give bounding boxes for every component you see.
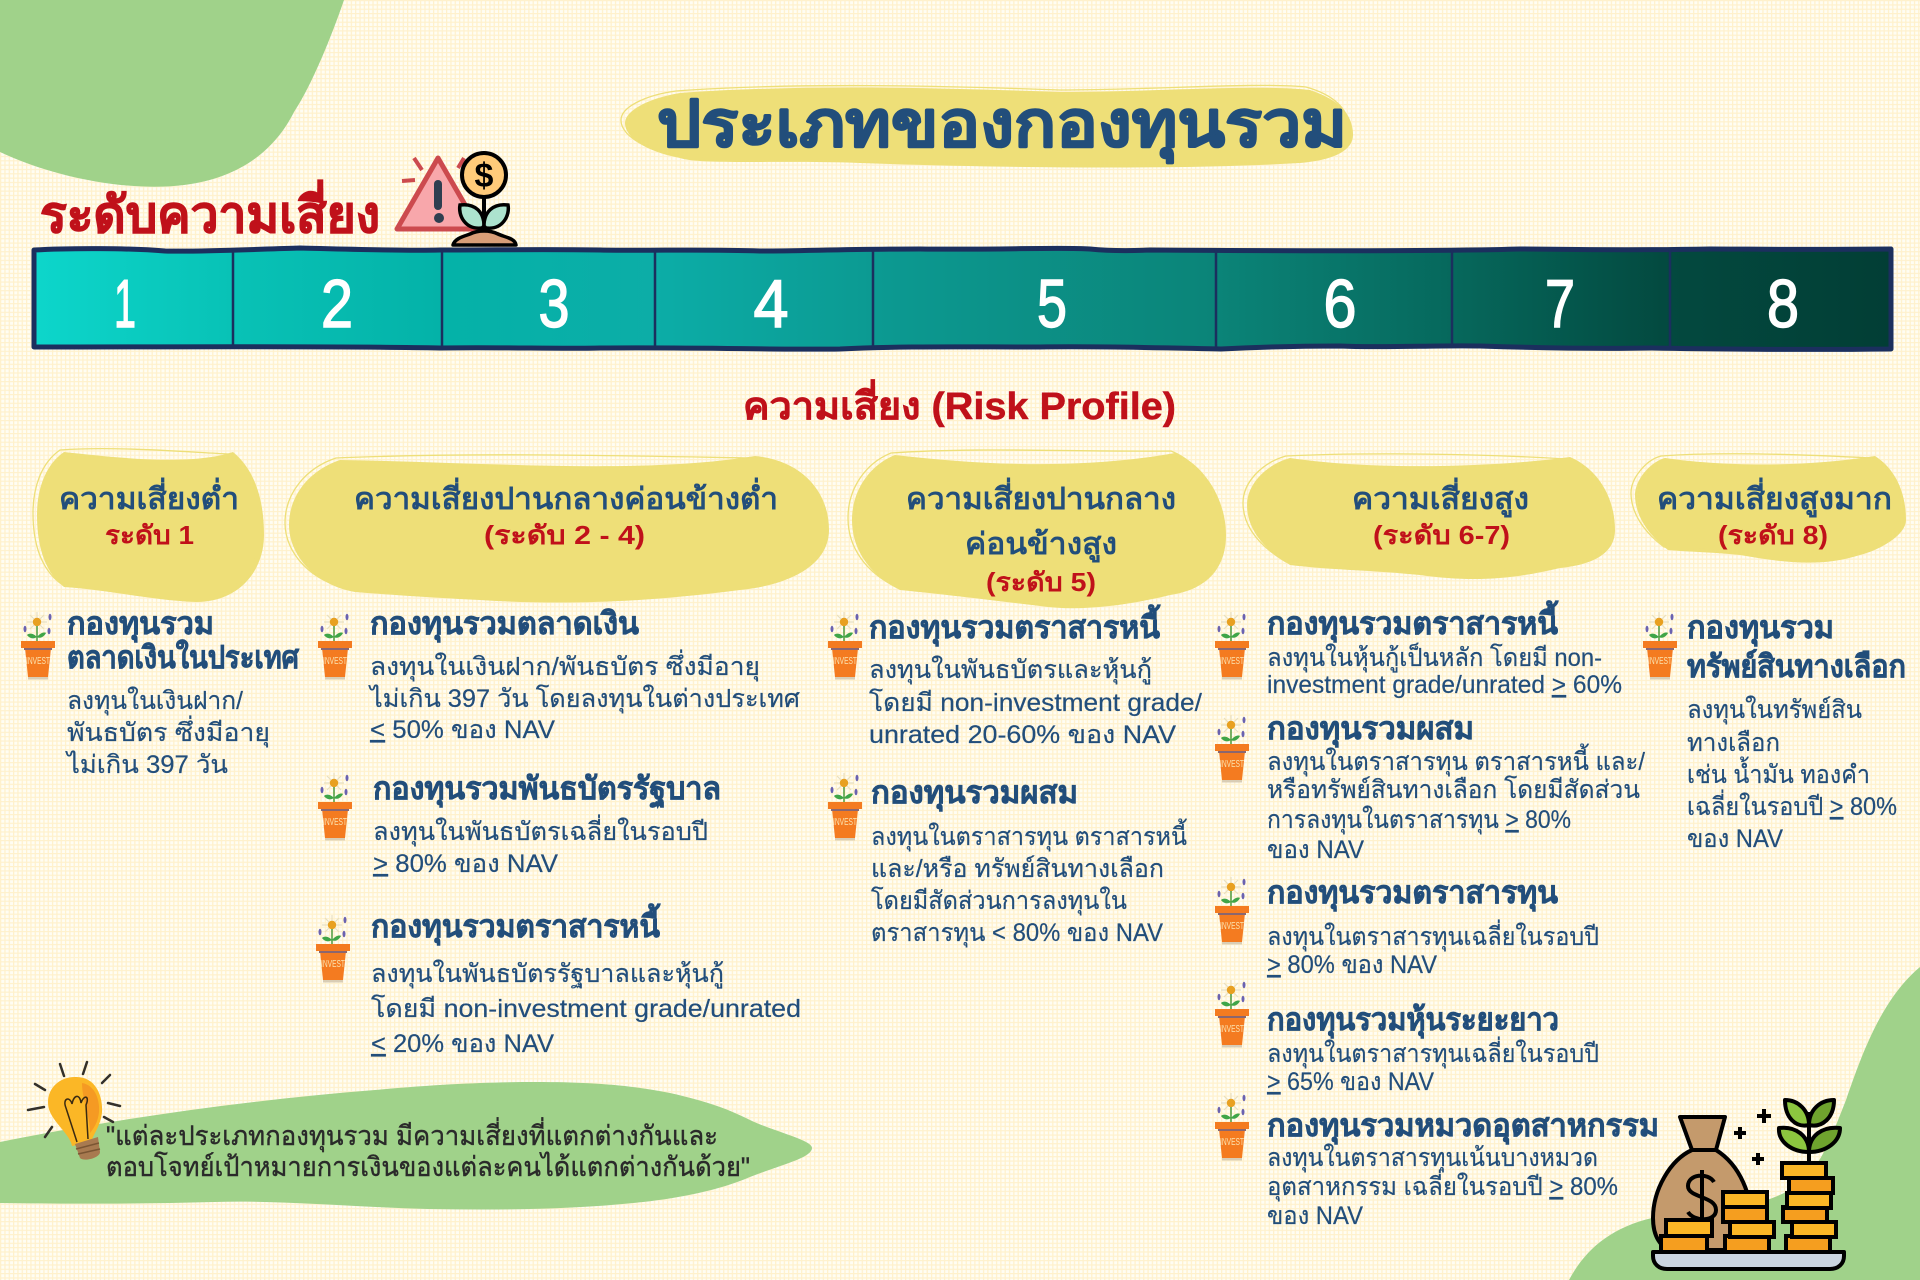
header: low risk: ระดับ 1 <box>105 520 194 550</box>
heading: risk profile: ความเสี่ยง (Risk Profile) <box>743 379 1176 428</box>
fund: alternative assets <box>1643 610 1906 853</box>
fund: long term equity: กองทุนรวมหุ้นระยะยาว <box>1267 1002 1559 1039</box>
fund: money market: ลงทุนในเงินฝาก/พันธบัตร ซึ่งมีอายุ <box>370 649 760 682</box>
callout: quote: "แต่ละประเภทกองทุนรวม มีความเสี่ยงที่แตกต่างกันและ <box>106 1117 718 1153</box>
fund: money market <box>318 606 800 744</box>
header: moderately high risk: ความเสี่ยงปานกลาง <box>906 477 1176 516</box>
level numbers: 1 <box>114 266 136 342</box>
panel: moderately high risk <box>828 450 1226 948</box>
fund: domestic money market: ตลาดเงินในประเทศ <box>67 639 300 675</box>
decorative blob: top left <box>0 0 344 187</box>
fund: domestic money market <box>21 606 300 779</box>
header: moderately low risk <box>285 455 829 603</box>
fund: government bond: ลงทุนในพันธบัตรเฉลี่ยในรอบปี <box>373 814 708 847</box>
level numbers: 4 <box>754 266 788 342</box>
tray <box>1653 1252 1844 1269</box>
panel: low risk <box>21 449 300 779</box>
fund: fixed income: กองทุนรวมตราสารหนี้ <box>869 604 1161 647</box>
fund: fixed income <box>316 903 801 1058</box>
fund: mixed: และ/หรือ ทรัพย์สินทางเลือก <box>871 855 1164 883</box>
icon: money bag and coins <box>1653 1100 1844 1269</box>
fund: fixed income: INVEST <box>833 656 857 667</box>
header: high risk <box>1243 454 1615 579</box>
fund: mixed: หรือทรัพย์สินทางเลือก โดยมีสัดส่วน <box>1267 775 1640 804</box>
fund: sector: กองทุนรวมหมวดอุตสาหกรรม <box>1267 1108 1659 1145</box>
fund: long term equity <box>1215 980 1599 1096</box>
risk scale bar <box>34 248 1891 349</box>
fund: long term equity: ลงทุนในตราสารทุนเฉลี่ยในรอบปี <box>1267 1036 1599 1069</box>
fund: sector: ของ NAV <box>1267 1202 1363 1230</box>
fund: equity: INVEST <box>1220 921 1244 932</box>
fund: mixed: ของ NAV <box>1267 836 1364 864</box>
fund: government bond: กองทุนรวมพันธบัตรรัฐบาล <box>373 771 721 809</box>
title: ประเภทของกองทุนรวม <box>657 88 1347 164</box>
fund: mixed <box>828 773 1187 948</box>
fund: money market: กองทุนรวมตลาดเงิน <box>370 606 639 643</box>
header: very high risk <box>1631 454 1906 563</box>
fund: alternative assets: ทางเลือก <box>1687 729 1780 757</box>
fund: sector <box>1215 1093 1659 1230</box>
level numbers: 5 <box>1037 266 1067 342</box>
sprout <box>1779 1100 1840 1164</box>
fund: mixed: กองทุนรวมผสม <box>871 775 1078 812</box>
fund: mixed: การลงทุนในตราสารทุน > 80% <box>1267 805 1571 835</box>
level numbers: 6 <box>1324 266 1356 342</box>
fund: fixed income: ลงทุนในพันธบัตรรัฐบาลและหุ้นกู้ <box>371 959 724 989</box>
fund: fixed income: < 20% ของ NAV <box>371 1030 554 1058</box>
fund: fixed income: INVEST <box>1220 656 1244 667</box>
fund: domestic money market: กองทุนรวม <box>67 606 214 643</box>
panel: high risk <box>1215 454 1659 1230</box>
fund: money market: ไม่เกิน 397 วัน โดยลงทุนในต่างประเทศ <box>368 684 800 714</box>
fund: fixed income: กองทุนรวมตราสารหนี้ <box>371 903 661 946</box>
fund: domestic money market: ลงทุนในเงินฝาก/ <box>67 686 243 716</box>
fund: equity: > 80% ของ NAV <box>1267 951 1437 979</box>
header: moderately low risk: (ระดับ 2 - 4) <box>484 520 645 550</box>
header: high risk: ความเสี่ยงสูง <box>1352 477 1529 518</box>
fund: money market: INVEST <box>323 656 347 667</box>
level numbers: 3 <box>538 266 570 342</box>
fund: mixed: INVEST <box>833 817 857 828</box>
heading: risk level: ระดับความเสี่ยง <box>40 180 380 243</box>
fund: fixed income: ลงทุนในพันธบัตรและหุ้นกู้ <box>869 655 1152 685</box>
fund: equity <box>1215 875 1599 979</box>
fund: fixed income <box>1215 600 1622 699</box>
fund: money market: < 50% ของ NAV <box>370 716 555 744</box>
fund: alternative assets: ลงทุนในทรัพย์สิน <box>1687 695 1862 725</box>
panel: moderately low risk <box>285 455 829 1058</box>
panel: very high risk <box>1631 454 1906 853</box>
decorative blob: bottom right <box>1569 967 1920 1280</box>
callout: quote <box>0 1082 812 1209</box>
fund: mixed: INVEST <box>1220 759 1244 770</box>
fund: long term equity: > 65% ของ NAV <box>1267 1068 1434 1096</box>
fund: fixed income: ลงทุนในหุ้นกู้เป็นหลัก โดยมี non- <box>1267 642 1602 673</box>
level numbers: 8 <box>1767 266 1799 342</box>
callout: quote: ตอบโจทย์เป้าหมายการเงินของแต่ละคนได้แตกต่างกันด้วย" <box>106 1151 750 1182</box>
fund: domestic money market: ไม่เกิน 397 วัน <box>65 750 228 779</box>
fund: alternative assets: เฉลี่ยในรอบปี > 80% <box>1687 789 1897 821</box>
fund: alternative assets: ของ NAV <box>1687 825 1783 853</box>
icon: warning triangle <box>397 158 479 229</box>
fund: mixed: โดยมีสัดส่วนการลงทุนใน <box>871 886 1127 916</box>
fund: mixed: ลงทุนในตราสารทุน ตราสารหนี้ <box>871 818 1187 852</box>
fund: sector: INVEST <box>1220 1137 1244 1148</box>
fund: mixed: ลงทุนในตราสารทุน ตราสารหนี้ และ/ <box>1267 743 1645 777</box>
level numbers: 2 <box>321 266 353 342</box>
fund: government bond <box>318 771 721 878</box>
sparkles <box>1734 1109 1771 1165</box>
header: high risk: (ระดับ 6-7) <box>1373 520 1510 550</box>
fund: fixed income: โดยมี non-investment grade/ <box>869 688 1202 717</box>
header: low risk: ความเสี่ยงต่ำ <box>59 477 239 516</box>
icon: light bulb <box>28 1062 120 1160</box>
fund: fixed income <box>828 604 1202 749</box>
fund: fixed income: โดยมี non-investment grade/unrated <box>371 994 801 1023</box>
coin stacks <box>1661 1163 1836 1252</box>
fund: alternative assets: กองทุนรวม <box>1687 610 1834 647</box>
fund: fixed income: investment grade/unrated > 60% <box>1267 671 1622 699</box>
fund: mixed: กองทุนรวมผสม <box>1267 711 1474 748</box>
fund: government bond: INVEST <box>323 817 347 828</box>
fund: domestic money market: INVEST <box>26 656 50 667</box>
header: moderately high risk: (ระดับ 5) <box>986 567 1096 597</box>
header: moderately high risk <box>848 450 1226 608</box>
fund: equity: ลงทุนในตราสารทุนเฉลี่ยในรอบปี <box>1267 919 1599 952</box>
fund: government bond: > 80% ของ NAV <box>373 850 558 878</box>
fund: fixed income: กองทุนรวมตราสารหนี้ <box>1267 600 1559 643</box>
fund: fixed income: INVEST <box>321 959 345 970</box>
fund: fixed income: unrated 20-60% ของ NAV <box>869 721 1176 749</box>
icon: money plant: $ <box>475 157 494 195</box>
header: very high risk: ความเสี่ยงสูงมาก <box>1657 477 1892 518</box>
fund: alternative assets: ทรัพย์สินทางเลือก <box>1687 649 1906 684</box>
fund: mixed <box>1215 711 1645 864</box>
level numbers <box>114 266 1799 342</box>
header: moderately high risk: ค่อนข้างสูง <box>965 528 1117 563</box>
fund: domestic money market: พันธบัตร ซึ่งมีอายุ <box>67 715 270 748</box>
fund: alternative assets: เช่น น้ำมัน ทองคำ <box>1687 756 1870 789</box>
fund: mixed: ตราสารทุน < 80% ของ NAV <box>871 919 1163 948</box>
level numbers: 7 <box>1545 266 1575 342</box>
money bag <box>1653 1117 1752 1250</box>
fund: alternative assets: INVEST <box>1648 656 1672 667</box>
icon: money plant <box>453 153 516 245</box>
header: moderately low risk: ความเสี่ยงปานกลางค่อนข้างต่ำ <box>354 477 778 516</box>
header: low risk <box>33 449 264 602</box>
header: very high risk: (ระดับ 8) <box>1718 520 1828 550</box>
fund: sector: อุตสาหกรรม เฉลี่ยในรอบปี > 80% <box>1267 1169 1618 1202</box>
fund: sector: ลงทุนในตราสารทุนเน้นบางหมวด <box>1267 1143 1598 1173</box>
fund: long term equity: INVEST <box>1220 1024 1244 1035</box>
fund: equity: กองทุนรวมตราสารทุน <box>1267 875 1558 912</box>
